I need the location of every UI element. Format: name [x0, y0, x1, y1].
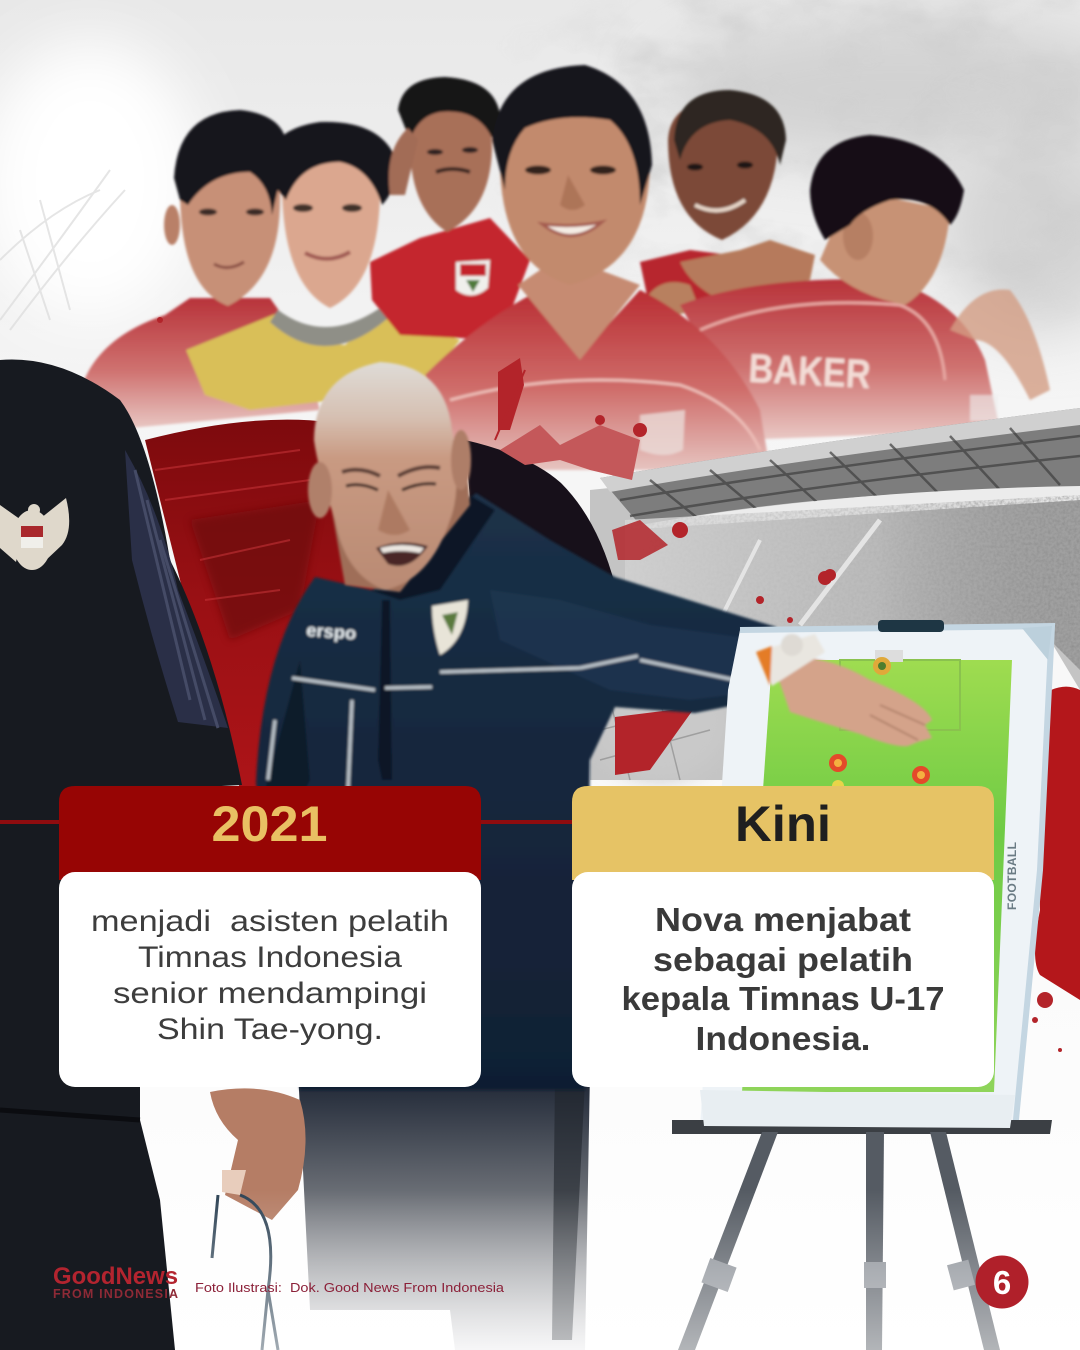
logo: GoodNews From Indonesia: FROM INDONESIA [53, 1287, 178, 1301]
Kini text card: Indonesia. [696, 1020, 870, 1057]
Kini text card: Nova menjabat [655, 901, 911, 938]
player 5 [640, 90, 815, 318]
bottom white fade [175, 1190, 1080, 1350]
logo: GoodNews From Indonesia: GoodNews [53, 1263, 178, 1290]
page number badge: 6 [993, 1264, 1011, 1301]
players group [78, 65, 1050, 470]
garuda emblem on chest [0, 498, 69, 570]
heading: 2021: 2021 [212, 796, 328, 852]
left figure: foreground person in black [0, 360, 242, 1350]
heading: Kini: Kini [735, 796, 831, 852]
2021 text card [59, 872, 481, 1087]
player 6 BAKER: BAKER [748, 345, 872, 397]
panel: 2021 [59, 786, 481, 1087]
coach arm hand and watch [756, 634, 932, 746]
brand name on jacket: erspo [306, 620, 357, 643]
2021 header band [59, 786, 481, 880]
2021 text card: Timnas Indonesia [138, 941, 402, 974]
player 3 saluting [370, 77, 530, 340]
stadium stands base [590, 440, 1080, 780]
page number badge [976, 1256, 1028, 1308]
2021 text card: menjadi asisten pelatih [91, 905, 449, 938]
background sky and clouds [0, 0, 1080, 578]
faded stadium arch, top left [0, 170, 125, 330]
coach head [308, 362, 471, 592]
coach: jacket [256, 493, 776, 1090]
player 1 [78, 110, 320, 430]
paint splatters [157, 317, 1062, 1117]
player 2 yellow kit [186, 122, 460, 410]
player 4 centre front [425, 65, 770, 470]
tactics board: FOOTBALL [1005, 842, 1019, 910]
coach's hand holding whistle [210, 1088, 306, 1350]
board ledge [672, 1120, 1052, 1134]
player 6 BAKER [680, 135, 1050, 440]
coach's shorts and legs [298, 1070, 590, 1350]
photo credit: Foto Ilustrasi: Dok. Good News From Indonesia [195, 1280, 505, 1295]
2021 text card: Shin Tae-yong. [157, 1013, 383, 1046]
Kini text card: sebagai pelatih [653, 941, 913, 978]
Kini text card: kepala Timnas U-17 [622, 980, 944, 1017]
Kini text card [572, 872, 994, 1087]
tactics board [672, 620, 1052, 1134]
crest on jacket [432, 600, 468, 655]
roof [600, 408, 1080, 525]
red flag swoosh with crowd [145, 420, 1080, 1000]
panel: Kini [572, 786, 994, 1087]
2021 text card: senior mendampingi [113, 977, 427, 1010]
connector line between cards [0, 820, 574, 824]
easel legs [678, 1132, 1000, 1350]
crowd texture [625, 495, 1080, 685]
Kini header band [572, 786, 994, 880]
stadium, black and white [590, 408, 1080, 780]
